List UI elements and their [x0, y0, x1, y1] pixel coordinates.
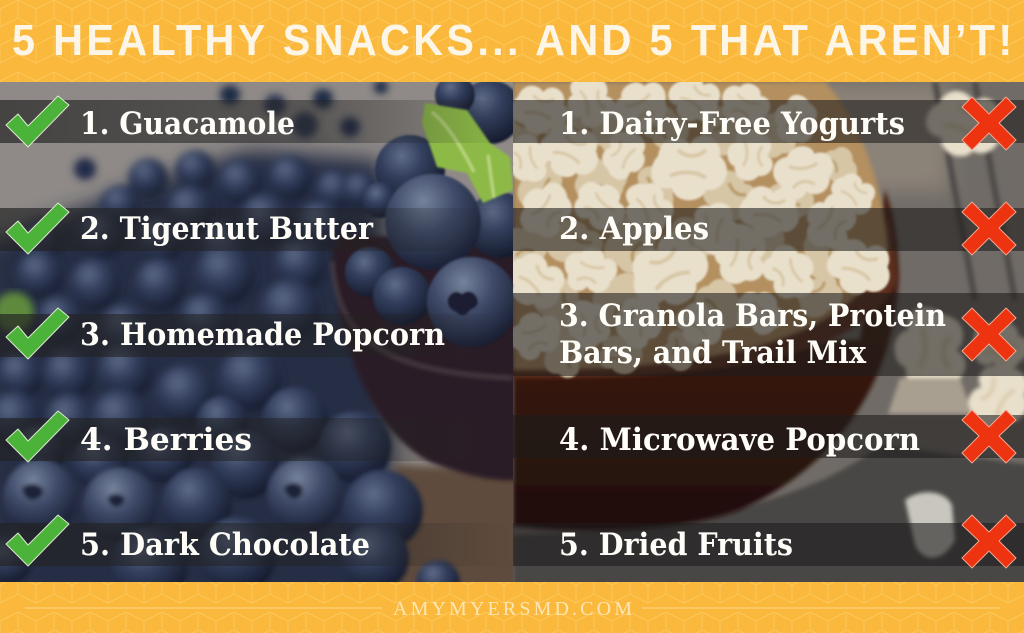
- decorative green leaf, left: [0, 292, 34, 332]
- item 1: 1. Dairy-Free Yogurts: [559, 106, 905, 142]
- cross 2: [962, 202, 1016, 255]
- item 4: 4. Microwave Popcorn: [559, 422, 920, 458]
- burlap cloth: [513, 446, 1024, 582]
- item 4: 4. Berries: [80, 422, 252, 458]
- item 3 line 2: Bars, and Trail Mix: [559, 335, 866, 371]
- loose popcorn: [888, 81, 1024, 558]
- item 1: 1. Guacamole: [80, 106, 295, 142]
- left list bars: [0, 100, 513, 566]
- check 2: [6, 203, 69, 254]
- footer banner: [0, 582, 1024, 633]
- unhealthy list: [559, 106, 946, 563]
- item 3: 3. Homemade Popcorn: [80, 317, 445, 353]
- check 5: [6, 515, 69, 566]
- wood planks: [935, 82, 1015, 300]
- panel: popcorn photo: [495, 67, 1024, 600]
- item 5: 5. Dried Fruits: [559, 527, 793, 563]
- item 3: 3. Granola Bars, Protein: [559, 298, 946, 334]
- wooden bowl: [513, 190, 898, 531]
- top banner: [0, 0, 1024, 82]
- popcorn pile: [513, 82, 888, 370]
- panel: blueberries photo: [0, 82, 513, 582]
- cross 4: [962, 410, 1016, 463]
- item 5: 5. Dark Chocolate: [80, 527, 370, 563]
- item 2: 2. Tigernut Butter: [80, 211, 374, 247]
- bowl: [332, 235, 520, 480]
- bowl berries: [344, 82, 513, 347]
- item 2: 2. Apples: [559, 211, 709, 247]
- footer url: AMYMYERSMD.COM: [393, 598, 632, 620]
- cross 3: [962, 308, 1016, 361]
- icon: mint leaf: [422, 103, 513, 203]
- healthy list: [80, 106, 445, 563]
- title: 5 HEALTHY SNACKS... AND 5 THAT AREN’T!: [12, 16, 1012, 65]
- check 3: [6, 308, 69, 359]
- check 4: [6, 411, 69, 462]
- cross 5: [962, 515, 1016, 568]
- icons: red crosses: [962, 97, 1016, 568]
- cross 1: [962, 97, 1016, 150]
- right list bars: [513, 100, 1024, 566]
- check 1: [6, 96, 69, 147]
- icons: green checks: [6, 96, 69, 566]
